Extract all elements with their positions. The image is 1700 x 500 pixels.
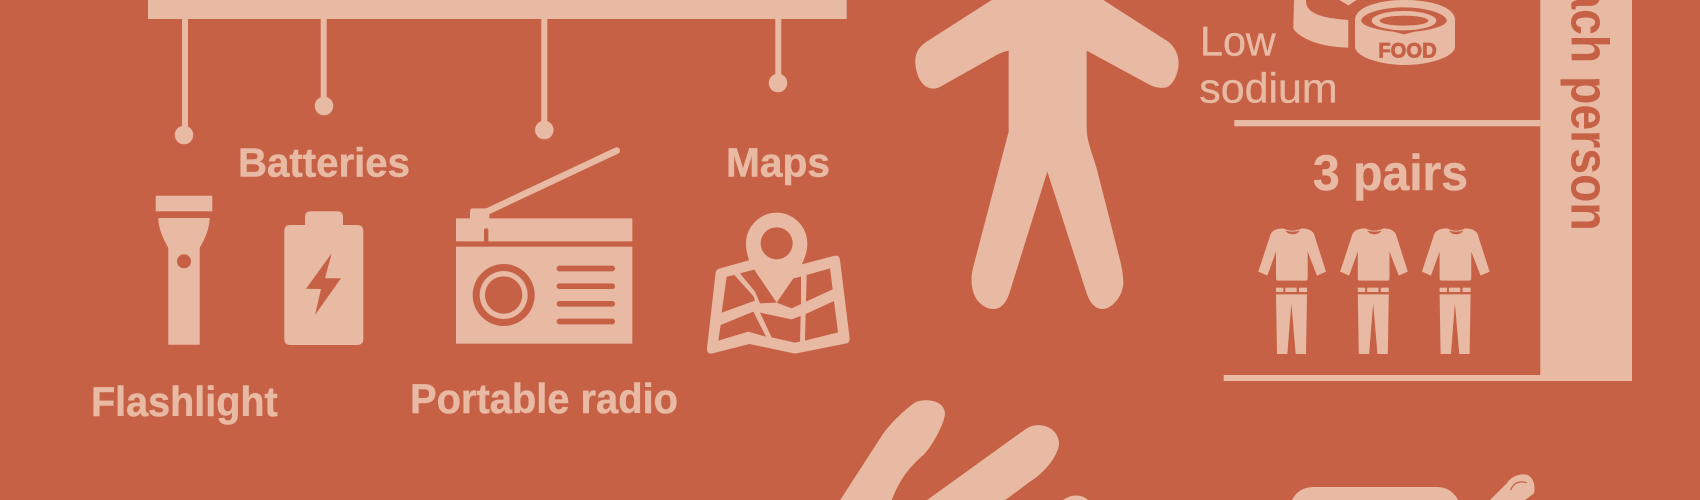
label: Low sodium: sodium: [1199, 64, 1338, 111]
panel: supplies rail with hanging tools: [148, 0, 847, 144]
stem: flashlight: [175, 18, 193, 144]
stem: maps: [769, 18, 787, 92]
icon: pin tip at bottom: [1490, 474, 1535, 500]
panel: each person side bar: [1540, 0, 1632, 381]
label: Portable radio: Portable radio: [410, 375, 678, 422]
label: Batteries: Batteries: [238, 140, 410, 186]
icon: portable radio: [456, 151, 632, 344]
label: Flashlight: Flashlight: [91, 378, 278, 425]
icon: map with location pin: [707, 213, 850, 354]
shelf line: food: [1234, 120, 1540, 126]
icon: food cans: [1293, 0, 1455, 65]
label: Maps: Maps: [726, 140, 830, 186]
icon: rounded item at bottom: [1292, 487, 1458, 500]
icon: clothing set 2: [1340, 228, 1408, 354]
label: 3 pairs: 3 pairs: [1313, 145, 1468, 201]
figure: hand fingers at bottom: [840, 400, 1088, 500]
stem: portable radio: [535, 18, 554, 139]
icon: clothing set 1: [1258, 228, 1326, 354]
can label: FOOD: [1378, 38, 1437, 62]
icon: flashlight: [156, 196, 212, 345]
label: Low sodium: Low: [1200, 18, 1276, 65]
icon: battery: [284, 211, 363, 345]
stem: batteries: [315, 18, 333, 115]
shelf line: clothes: [1224, 375, 1541, 381]
top rail bar: [148, 0, 847, 19]
icon: clothing set 3: [1422, 228, 1490, 354]
figure: person silhouette: [915, 0, 1179, 309]
label: Low sodium: [1199, 18, 1338, 111]
